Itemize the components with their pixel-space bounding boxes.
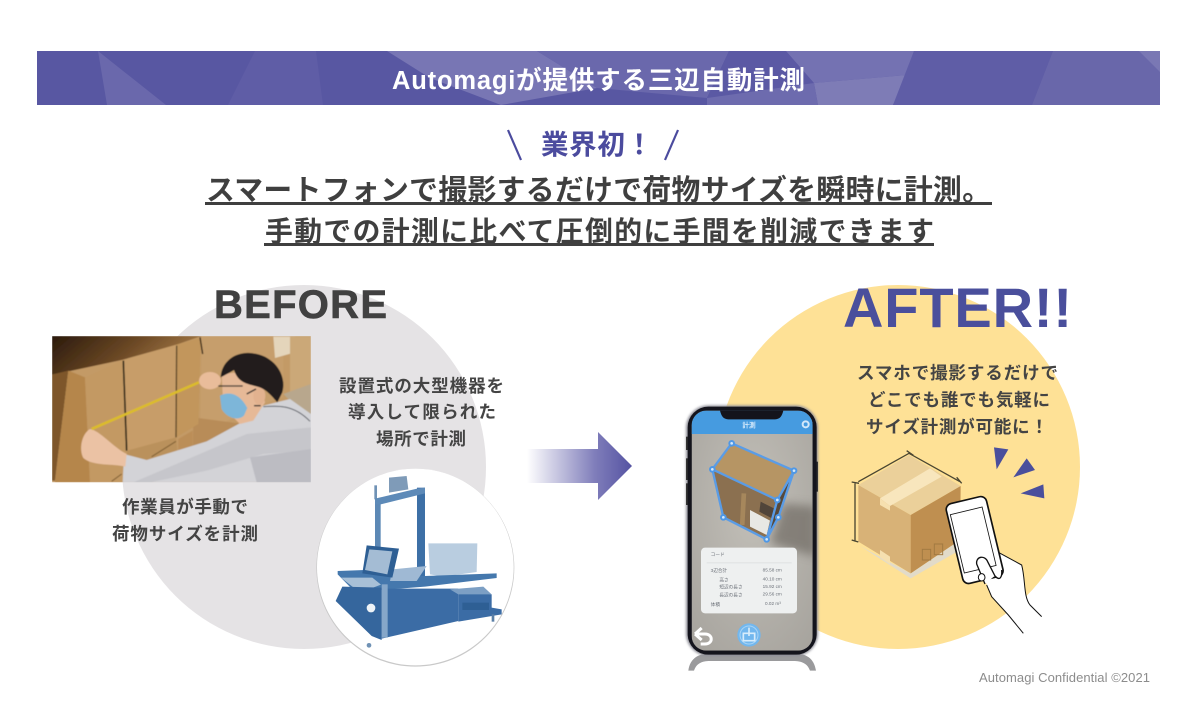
illustration: hand holding smartphone [945,495,1042,633]
note: worker measures by hand: 作業員が手動で [122,497,248,517]
headline: 手動での計測に比べて圧倒的に手間を削減できます [265,216,934,247]
left hand [81,429,127,467]
icon: emphasis marks [994,447,1044,498]
panel: before [52,283,514,667]
machine photo in circle [316,469,514,667]
after background circle [716,285,1080,649]
results panel: 29.56 cm [763,592,782,597]
phone notch [720,411,783,419]
note: worker measures by hand: 荷物サイズを計測 [112,524,258,544]
phone stand [688,653,816,671]
results panel: 15.92 cm [763,584,782,589]
face mask [220,393,247,418]
smartphone measuring app [686,405,818,671]
note: measure anywhere with smartphone: サイズ計測が可能に！ [866,417,1048,437]
note: measure anywhere with smartphone [857,363,1058,437]
results panel: 3辺合計 [711,567,728,574]
illustration: box with dimensions [852,451,962,578]
results panel: 長辺の長さ [719,591,743,598]
results panel: 40.10 cm [763,577,782,582]
badge: industry first [508,129,678,160]
note: worker measures by hand [112,497,258,544]
headline: スマートフォンで撮影するだけで荷物サイズを瞬時に計測。 [206,174,991,207]
note: installed large machine [339,376,504,449]
app bar title: 計測 [742,421,756,430]
results panel: 85.58 cm [763,567,782,572]
note: measure anywhere with smartphone: どこでも誰でも気軽に [868,390,1050,410]
arrow [527,432,632,500]
shirt [123,399,311,482]
measured box [715,446,792,498]
note: installed large machine: 導入して限られた [348,402,496,422]
badge: industry first: 業界初！ [541,129,653,160]
results panel: コード [711,552,725,557]
before background circle [122,285,486,649]
measuring tape [92,382,199,429]
back arrow [695,628,711,644]
results panel [701,548,797,613]
footer copyright: Automagi Confidential ©2021 [979,670,1150,685]
after heading: AFTER!! [843,276,1072,339]
right hand [199,372,221,389]
capture button [737,623,761,647]
note: installed large machine: 場所で計測 [376,429,466,449]
headline [205,174,992,247]
photo: worker measuring box by hand [52,336,311,482]
settings gear [803,421,809,427]
face and neck [222,371,265,424]
results panel: 高さ [719,576,729,583]
before heading: BEFORE [214,283,387,327]
hair [221,353,283,402]
results panel: 体積 [711,601,720,608]
results panel: 0.02 m³ [765,601,781,606]
panel: after [686,276,1080,671]
results panel: 短辺の長さ [719,584,743,591]
note: installed large machine: 設置式の大型機器を [339,376,504,396]
header title: Automagiが提供する三辺自動計測 [392,66,805,95]
header band [37,51,1160,105]
note: measure anywhere with smartphone: スマホで撮影するだけで [857,363,1058,383]
